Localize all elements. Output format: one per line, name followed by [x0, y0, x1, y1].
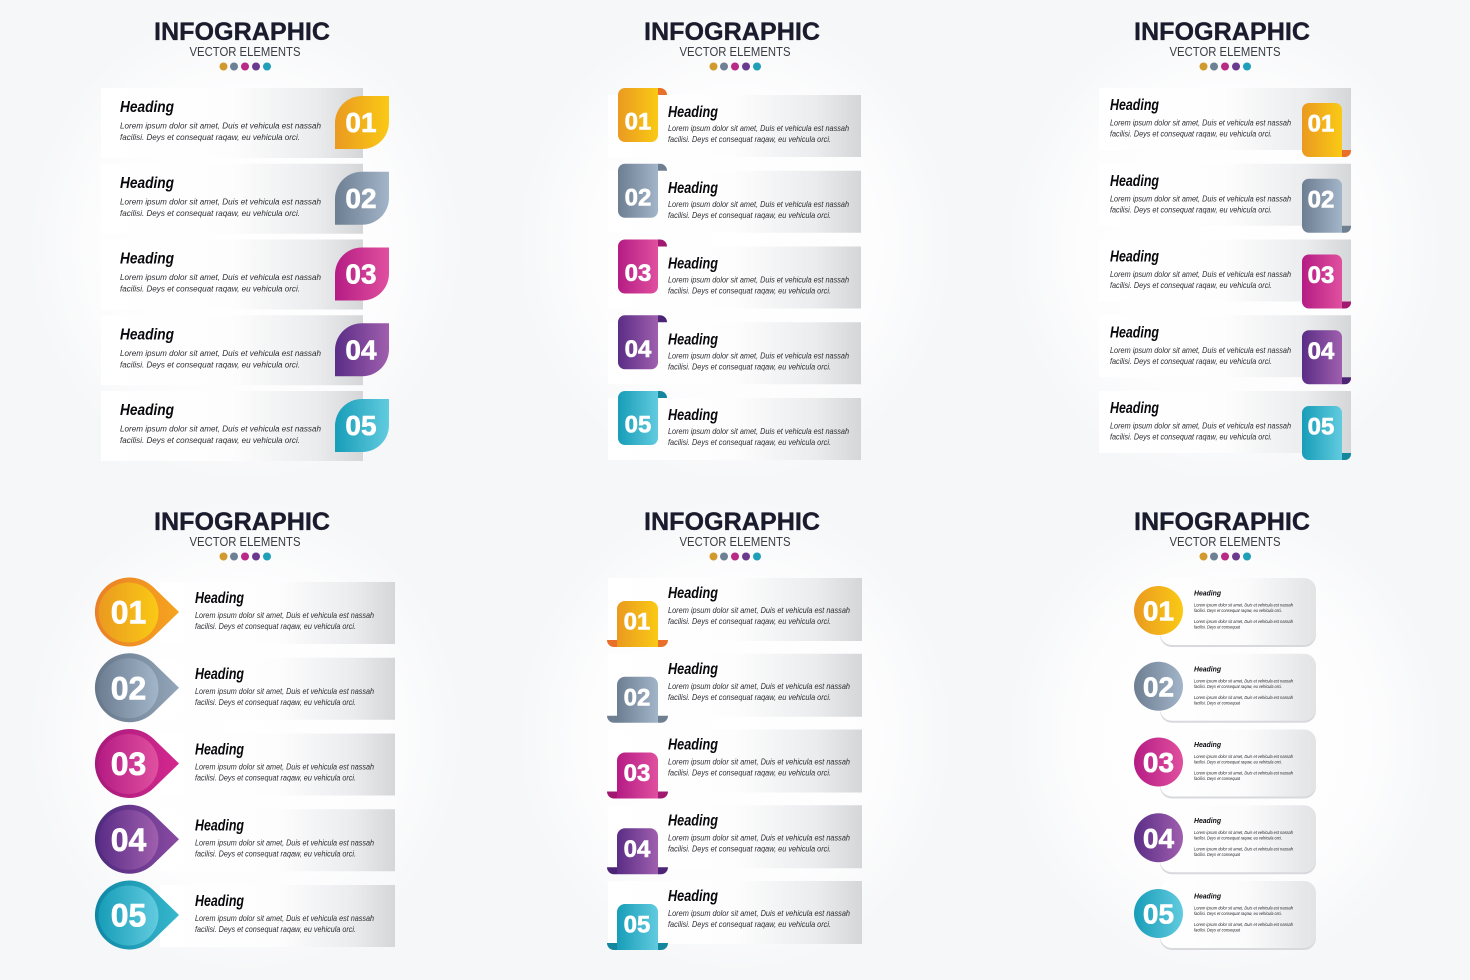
row 02: 02 [624, 684, 650, 711]
row 05: 05 [624, 912, 650, 938]
row 04: Lorem ipsum dolor sit amet, Duis et vehicula est nassah [1194, 846, 1293, 851]
row 04 [1099, 315, 1351, 384]
row 04: 04 [625, 336, 652, 363]
row 05: Lorem ipsum dolor sit amet, Duis et vehicula est nassah [120, 424, 321, 434]
row 02: Lorem ipsum dolor sit amet, Duis et vehicula est nassah [1194, 695, 1293, 700]
title block [644, 18, 820, 70]
row 05: Heading [668, 407, 718, 424]
row 02: Heading [120, 175, 174, 192]
row 02: Heading [195, 666, 244, 683]
row 02: Lorem ipsum dolor sit amet, Duis et vehicula est nassah [668, 681, 850, 691]
row 03: facilisi. Deys et consequat raqaw, eu vehicula orci. [120, 284, 300, 294]
row 05: Heading [1194, 892, 1221, 900]
row 05: facilisi. Deys et consequat raqaw, eu vehicula orci. [668, 919, 831, 929]
row 02: 02 [625, 184, 651, 211]
row 02: facilisi. Deys et consequat raqaw, eu vehicula orci. [668, 692, 831, 702]
row 03: Lorem ipsum dolor sit amet, Duis et vehicula est nassah [195, 762, 374, 772]
row 04: Lorem ipsum dolor sit amet, Duis et vehicula est nassah [195, 837, 374, 847]
row 03: facilisi. Deys et consequat raqaw, eu vehicula orci. [1194, 760, 1282, 764]
row 05 [608, 391, 861, 460]
row 03: 03 [624, 760, 650, 787]
row 03: facilisi. Deys et consequat raqaw, eu vehicula orci. [1110, 280, 1272, 290]
row 03: Lorem ipsum dolor sit amet, Duis et vehicula est nassah [1194, 754, 1293, 759]
row 04: Heading [1194, 816, 1221, 825]
title block: VECTOR ELEMENTS [190, 45, 300, 59]
row 03: Lorem ipsum dolor sit amet, Duis et vehicula est nassah [120, 272, 321, 282]
row 01: Lorem ipsum dolor sit amet, Duis et vehicula est nassah [1110, 118, 1291, 128]
row 05 [1134, 881, 1316, 950]
row 02: Lorem ipsum dolor sit amet, Duis et vehicula est nassah [195, 686, 374, 696]
row 01: Lorem ipsum dolor sit amet, Duis et vehicula est nassah [1194, 602, 1293, 608]
row 05: Lorem ipsum dolor sit amet, Duis et vehicula est nassah [1194, 922, 1293, 927]
row 01: facilisi. Deys et consequat raqaw, eu vehicula orci. [1110, 128, 1272, 138]
row 04: facilisi. Deys et consequat raqaw, eu vehicula orci. [1110, 356, 1272, 366]
row 03: 03 [345, 258, 377, 290]
title block [154, 508, 330, 560]
row 01: facilisi. Deys et consequat raqaw, eu vehicula orci. [668, 134, 831, 144]
row 04: facilisi. Deys et consequat raqaw, eu vehicula orci. [195, 848, 356, 858]
row 01: facilisi. Deys et consequat [1194, 624, 1241, 630]
row 04: Lorem ipsum dolor sit amet, Duis et vehicula est nassah [120, 348, 321, 358]
panel: bottom left, teardrop pointers [95, 508, 395, 949]
row 03: Lorem ipsum dolor sit amet, Duis et vehicula est nassah [668, 756, 850, 766]
title block: VECTOR ELEMENTS [1170, 535, 1280, 549]
row 03: Heading [668, 256, 718, 272]
row 04: facilisi. Deys et consequat raqaw, eu vehicula orci. [668, 361, 831, 371]
row 02: 02 [1143, 671, 1174, 702]
panel: bottom right, circles with rounded cards [1134, 508, 1316, 950]
row 04 [608, 315, 861, 384]
panel: top middle, tabbed badges at top [608, 18, 861, 460]
row 04: 04 [624, 836, 651, 863]
row 05: Lorem ipsum dolor sit amet, Duis et vehicula est nassah [1110, 420, 1291, 430]
row 02 [1134, 654, 1316, 723]
row 02: 02 [111, 670, 146, 706]
row 02: facilisi. Deys et consequat raqaw, eu vehicula orci. [1194, 684, 1282, 689]
row 05: 05 [111, 898, 146, 934]
panel: top left, leaf badges [101, 18, 389, 461]
title block: INFOGRAPHIC [154, 508, 330, 536]
row 01: 01 [1308, 110, 1334, 138]
row 05: Lorem ipsum dolor sit amet, Duis et vehicula est nassah [1194, 906, 1293, 910]
row 03: Lorem ipsum dolor sit amet, Duis et vehicula est nassah [1194, 770, 1293, 776]
row 01 [608, 88, 861, 157]
row 02: 02 [345, 183, 377, 214]
row 01: facilisi. Deys et consequat raqaw, eu vehicula orci. [195, 621, 356, 631]
row 05 [95, 880, 395, 949]
title block [1134, 508, 1310, 560]
row 01: Heading [195, 590, 244, 607]
row 01: facilisi. Deys et consequat raqaw, eu vehicula orci. [668, 616, 831, 626]
row 04: facilisi. Deys et consequat [1194, 852, 1241, 857]
row 02 [95, 653, 395, 722]
row 03: facilisi. Deys et consequat [1194, 776, 1241, 781]
row 03: Heading [195, 742, 244, 758]
row 02: 02 [1308, 186, 1334, 213]
row 04: Lorem ipsum dolor sit amet, Duis et vehicula est nassah [1194, 830, 1293, 835]
title block: VECTOR ELEMENTS [680, 535, 790, 549]
row 03 [101, 240, 389, 310]
row 05: Heading [120, 402, 174, 419]
row 03 [608, 240, 861, 308]
row 05: facilisi. Deys et consequat raqaw, eu vehicula orci. [195, 924, 356, 934]
panel: top right, tabbed badges at bottom [1099, 18, 1351, 460]
row 05: Lorem ipsum dolor sit amet, Duis et vehicula est nassah [195, 913, 374, 923]
row 05 [101, 391, 389, 461]
row 01 [1099, 88, 1351, 157]
row 04: Lorem ipsum dolor sit amet, Duis et vehicula est nassah [668, 350, 849, 360]
row 03: facilisi. Deys et consequat raqaw, eu vehicula orci. [668, 768, 831, 778]
row 03 [95, 729, 395, 798]
row 05: Heading [195, 893, 244, 910]
row 02: facilisi. Deys et consequat raqaw, eu vehicula orci. [120, 208, 300, 218]
row 04: facilisi. Deys et consequat raqaw, eu vehicula orci. [668, 843, 831, 853]
row 01: Lorem ipsum dolor sit amet, Duis et vehicula est nassah [668, 605, 850, 615]
row 05: Heading [668, 888, 718, 905]
row 01: Lorem ipsum dolor sit amet, Duis et vehicula est nassah [668, 123, 849, 133]
row 05 [1099, 391, 1351, 460]
row 01: 01 [345, 107, 377, 138]
title block [154, 18, 330, 70]
row 05: Heading [1110, 400, 1159, 417]
row 02 [101, 164, 389, 234]
title block: VECTOR ELEMENTS [680, 45, 790, 59]
row 04 [607, 805, 862, 874]
row 05: 05 [345, 410, 377, 441]
row 03 [1099, 240, 1351, 308]
row 02: Heading [668, 661, 718, 678]
row 03: facilisi. Deys et consequat raqaw, eu vehicula orci. [195, 772, 356, 782]
row 05: facilisi. Deys et consequat raqaw, eu vehicula orci. [120, 435, 300, 445]
row 01: Lorem ipsum dolor sit amet, Duis et vehicula est nassah [195, 610, 374, 620]
row 03: Lorem ipsum dolor sit amet, Duis et vehicula est nassah [668, 274, 849, 284]
row 04: Heading [668, 331, 718, 348]
row 01: Heading [1194, 588, 1221, 598]
row 04: 04 [111, 822, 146, 858]
row 05: facilisi. Deys et consequat raqaw, eu vehicula orci. [1194, 911, 1282, 916]
row 01: 01 [625, 108, 651, 136]
row 01: 01 [1143, 596, 1174, 626]
row 04 [101, 315, 389, 385]
title block [1134, 18, 1310, 70]
row 03: facilisi. Deys et consequat raqaw, eu vehicula orci. [668, 286, 831, 296]
row 01: Lorem ipsum dolor sit amet, Duis et vehicula est nassah [1194, 619, 1293, 624]
row 02: facilisi. Deys et consequat raqaw, eu vehicula orci. [668, 210, 831, 220]
row 04: Heading [668, 812, 718, 829]
row 04: 04 [345, 334, 377, 365]
row 04: Heading [120, 326, 174, 343]
row 04 [95, 805, 395, 874]
row 02: facilisi. Deys et consequat raqaw, eu vehicula orci. [1110, 204, 1272, 214]
row 05: Lorem ipsum dolor sit amet, Duis et vehicula est nassah [668, 908, 850, 918]
row 05: facilisi. Deys et consequat raqaw, eu vehicula orci. [1110, 432, 1272, 442]
title block: INFOGRAPHIC [1134, 508, 1310, 536]
row 01: 01 [624, 608, 650, 636]
row 05: facilisi. Deys et consequat raqaw, eu vehicula orci. [668, 437, 831, 447]
row 02 [607, 654, 862, 723]
row 01: facilisi. Deys et consequat raqaw, eu vehicula orci. [120, 132, 300, 142]
row 03: Heading [668, 736, 718, 754]
row 05: facilisi. Deys et consequat [1194, 928, 1241, 932]
row 05: 05 [1308, 414, 1334, 440]
title block: INFOGRAPHIC [154, 18, 330, 46]
row 01 [95, 578, 395, 646]
row 02: Heading [1110, 173, 1159, 190]
row 04 [1134, 805, 1316, 874]
title block: VECTOR ELEMENTS [190, 535, 300, 549]
row 04: Lorem ipsum dolor sit amet, Duis et vehicula est nassah [1110, 345, 1291, 355]
row 02: Heading [1194, 664, 1221, 673]
row 02: facilisi. Deys et consequat raqaw, eu vehicula orci. [195, 697, 356, 707]
row 01: Heading [1110, 97, 1159, 114]
title block: INFOGRAPHIC [644, 508, 820, 536]
row 04: Lorem ipsum dolor sit amet, Duis et vehicula est nassah [668, 832, 850, 842]
row 04: Heading [195, 817, 244, 834]
row 03: Heading [1110, 248, 1159, 266]
title block: INFOGRAPHIC [1134, 18, 1310, 46]
row 05: 05 [1143, 898, 1174, 930]
row 04: facilisi. Deys et consequat raqaw, eu vehicula orci. [120, 359, 300, 369]
row 03: 03 [1143, 747, 1174, 778]
row 01 [101, 88, 389, 158]
row 01: Heading [668, 104, 718, 121]
row 03 [1134, 730, 1316, 798]
row 02: Lorem ipsum dolor sit amet, Duis et vehicula est nassah [668, 199, 849, 209]
row 04: 04 [1143, 823, 1174, 854]
row 03: Heading [120, 250, 174, 268]
title block: VECTOR ELEMENTS [1170, 45, 1280, 59]
row 01: Heading [668, 585, 718, 602]
row 05: Lorem ipsum dolor sit amet, Duis et vehicula est nassah [668, 426, 849, 436]
row 04: 04 [1308, 338, 1335, 365]
row 03: Heading [1194, 740, 1221, 749]
row 01: facilisi. Deys et consequat raqaw, eu vehicula orci. [1194, 608, 1282, 613]
row 05 [607, 881, 862, 950]
row 02: Lorem ipsum dolor sit amet, Duis et vehicula est nassah [1110, 193, 1291, 203]
row 05: 05 [625, 412, 651, 438]
row 04: Heading [1110, 324, 1159, 341]
row 02: facilisi. Deys et consequat [1194, 700, 1241, 705]
row 02: Lorem ipsum dolor sit amet, Duis et vehicula est nassah [1194, 678, 1293, 683]
row 01: 01 [111, 594, 146, 630]
panel: bottom middle, footed badges [607, 508, 862, 950]
row 01: Lorem ipsum dolor sit amet, Duis et vehicula est nassah [120, 120, 321, 130]
row 02 [608, 164, 861, 233]
title block [644, 508, 820, 560]
row 03 [607, 730, 862, 798]
row 02: Lorem ipsum dolor sit amet, Duis et vehicula est nassah [120, 196, 321, 206]
row 03: 03 [111, 746, 146, 782]
row 03: Lorem ipsum dolor sit amet, Duis et vehicula est nassah [1110, 269, 1291, 279]
row 03: 03 [1308, 262, 1334, 289]
row 01 [1134, 578, 1316, 647]
row 02 [1099, 164, 1351, 233]
row 03: 03 [625, 260, 651, 287]
title block: INFOGRAPHIC [644, 18, 820, 46]
row 02: Heading [668, 180, 718, 197]
row 01 [607, 578, 862, 647]
row 04: facilisi. Deys et consequat raqaw, eu vehicula orci. [1194, 835, 1282, 840]
row 01: Heading [120, 99, 174, 116]
